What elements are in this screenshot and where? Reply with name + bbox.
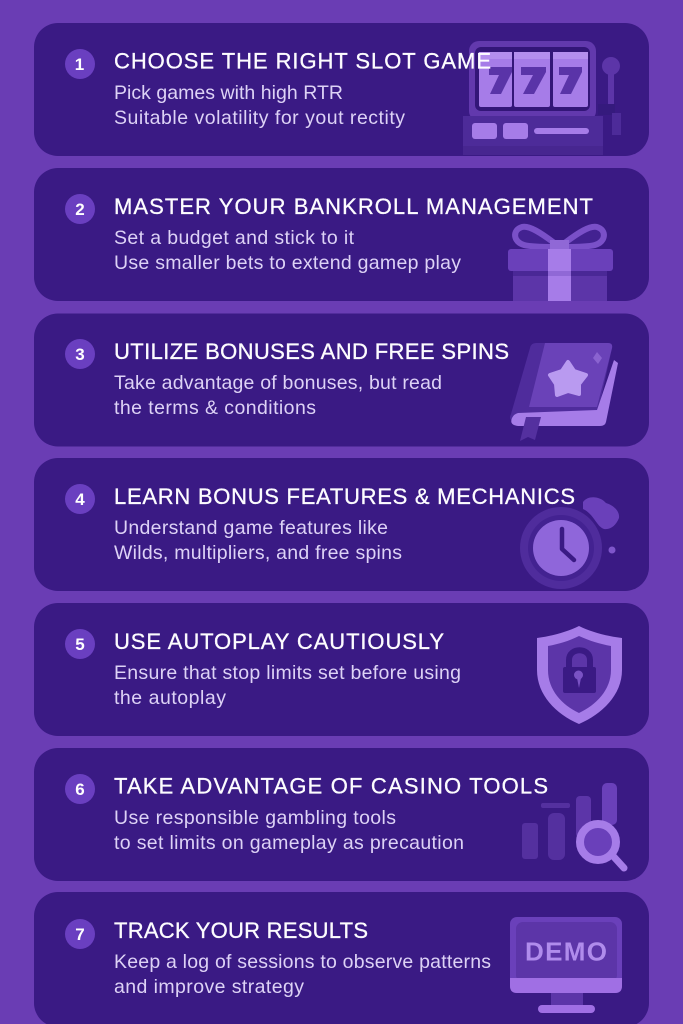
icon: gift box — [508, 227, 613, 301]
description: Suitable volatility for yout rectity — [114, 107, 405, 129]
icon: slot machine — [463, 41, 621, 155]
icon: bar chart with magnifier — [522, 783, 624, 868]
heading: TAKE ADVANTAGE OF CASINO TOOLS — [114, 774, 548, 798]
number badge 1 — [65, 49, 95, 79]
icon: shield with padlock — [537, 626, 622, 724]
panel: tip 7 track your results — [34, 892, 649, 1024]
heading: TRACK YOUR RESULTS — [114, 918, 368, 943]
number badge 1: 1 — [75, 55, 84, 74]
number badge 7: 7 — [75, 925, 85, 944]
panel: tip 3 utilize bonuses and free spins — [34, 314, 649, 446]
heading: USE AUTOPLAY CAUTIOUSLY — [114, 629, 444, 654]
description: the terms & conditions — [114, 397, 316, 419]
description — [114, 517, 402, 564]
description: Use responsible gambling tools — [114, 807, 396, 829]
number badge 5: 5 — [75, 635, 85, 654]
number badge 2 — [65, 194, 95, 224]
description: Take advantage of bonuses, but read — [114, 372, 442, 394]
description — [114, 807, 464, 854]
description: Wilds, multipliers, and free spins — [114, 542, 402, 564]
heading: UTILIZE BONUSES AND FREE SPINS — [114, 339, 509, 364]
number badge 4 — [65, 484, 95, 514]
description — [114, 951, 491, 998]
number badge 5 — [65, 629, 95, 659]
description: Ensure that stop limits set before using — [114, 662, 461, 684]
description — [114, 372, 442, 419]
heading: CHOOSE THE RIGHT SLOT GAME — [114, 48, 491, 74]
heading: MASTER YOUR BANKROLL MANAGEMENT — [114, 194, 593, 219]
description — [114, 227, 461, 274]
description: Understand game features like — [114, 517, 388, 539]
description: Set a budget and stick to it — [114, 227, 355, 249]
description: the autoplay — [114, 687, 226, 709]
panel: tip 5 use autoplay cautiously — [34, 603, 649, 736]
number badge 2: 2 — [75, 200, 85, 219]
description — [114, 662, 461, 709]
number badge 6: 6 — [75, 780, 85, 799]
icon: demo monitor — [510, 917, 622, 1013]
description: Pick games with high RTR — [114, 82, 343, 104]
icon: alarm clock — [520, 497, 619, 589]
number badge 3 — [65, 339, 95, 369]
number badge 6 — [65, 774, 95, 804]
panel: tip 4 learn bonus features and mechanics — [34, 458, 649, 591]
heading: LEARN BONUS FEATURES & MECHANICS — [114, 484, 575, 509]
number badge 4: 4 — [75, 490, 85, 509]
description: Use smaller bets to extend gamep play — [114, 252, 461, 274]
description: Keep a log of sessions to observe patterns — [114, 951, 491, 973]
number badge 3: 3 — [75, 345, 85, 364]
panel: tip 1 choose the right slot game — [34, 23, 649, 156]
description: and improve strategy — [114, 976, 304, 998]
monitor label: DEMO — [525, 936, 607, 966]
panel: tip 2 master your bankroll management — [34, 168, 649, 301]
description: to set limits on gameplay as precaution — [114, 832, 464, 854]
panel: tip 6 take advantage of casino tools — [34, 748, 649, 881]
number badge 7 — [65, 919, 95, 949]
description — [114, 82, 405, 129]
icon: star book — [510, 343, 618, 441]
